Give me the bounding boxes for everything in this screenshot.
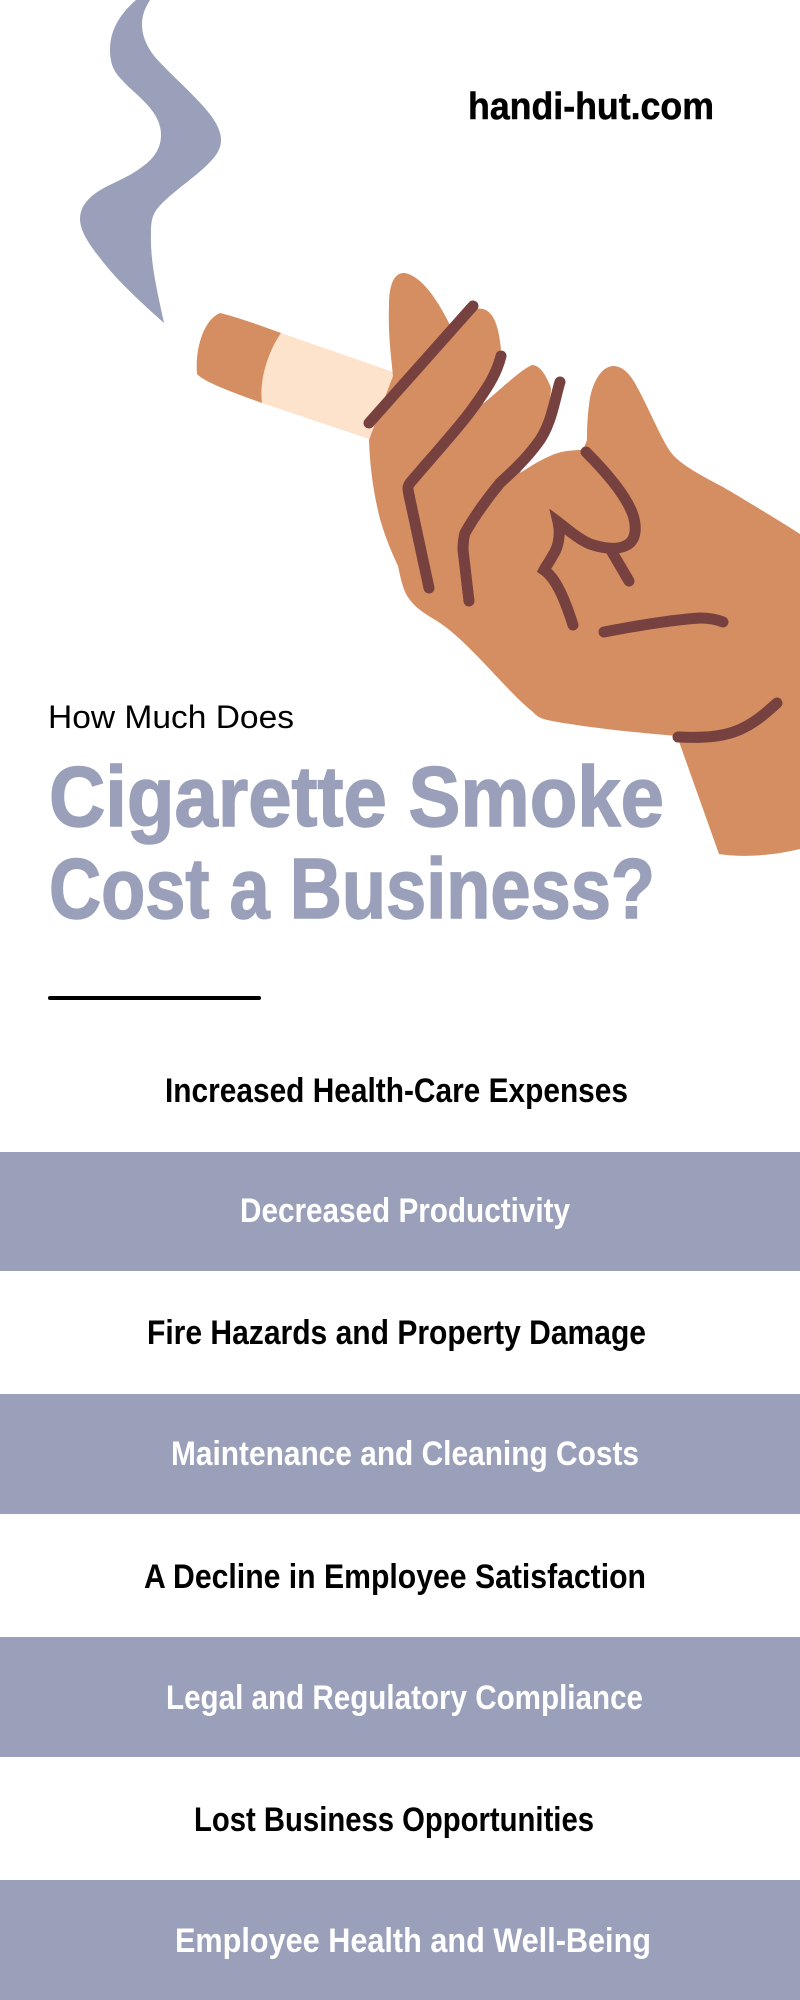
item 2: Decreased Productivity: Decreased Productivity xyxy=(240,1192,570,1230)
icon: cigarette xyxy=(197,313,396,440)
item 6: Legal and Regulatory Compliance: Legal and Regulatory Compliance xyxy=(166,1679,643,1717)
icon: hand holding cigarette xyxy=(369,273,800,856)
icon: smoke wisp xyxy=(80,0,221,323)
cigarette filter xyxy=(197,313,281,403)
item 6: Legal and Regulatory Compliance xyxy=(0,1637,800,1757)
index finger line xyxy=(369,306,473,423)
ring finger line xyxy=(463,382,560,601)
wrist line xyxy=(678,703,777,737)
middle finger line xyxy=(408,356,501,588)
title underline xyxy=(48,996,261,1000)
item 7: Lost Business Opportunities: Lost Business Opportunities xyxy=(194,1801,594,1839)
item 3: Fire Hazards and Property Damage: Fire Hazards and Property Damage xyxy=(147,1314,646,1352)
item 1: Increased Health-Care Expenses: Increased Health-Care Expenses xyxy=(165,1072,628,1110)
title kicker: How Much Does xyxy=(48,699,294,735)
finger lines xyxy=(369,306,777,737)
item 4: Maintenance and Cleaning Costs xyxy=(0,1394,800,1514)
thumb nail and knuckle line xyxy=(544,452,635,625)
item 8: Employee Health and Well-Being: Employee Health and Well-Being xyxy=(175,1922,651,1960)
palm line xyxy=(604,618,723,632)
title line one: Cigarette Smoke xyxy=(49,750,664,845)
title line two: Cost a Business? xyxy=(49,842,655,937)
item 2: Decreased Productivity xyxy=(0,1152,800,1271)
hand shape xyxy=(369,273,800,856)
cigarette paper xyxy=(261,333,396,440)
item 8: Employee Health and Well-Being xyxy=(0,1880,800,2000)
title block xyxy=(48,699,664,937)
thumb crease xyxy=(612,552,629,581)
website label: handi-hut.com xyxy=(468,86,714,128)
item 5: A Decline in Employee Satisfaction: A Decline in Employee Satisfaction xyxy=(144,1558,646,1596)
item 4: Maintenance and Cleaning Costs: Maintenance and Cleaning Costs xyxy=(171,1435,639,1473)
